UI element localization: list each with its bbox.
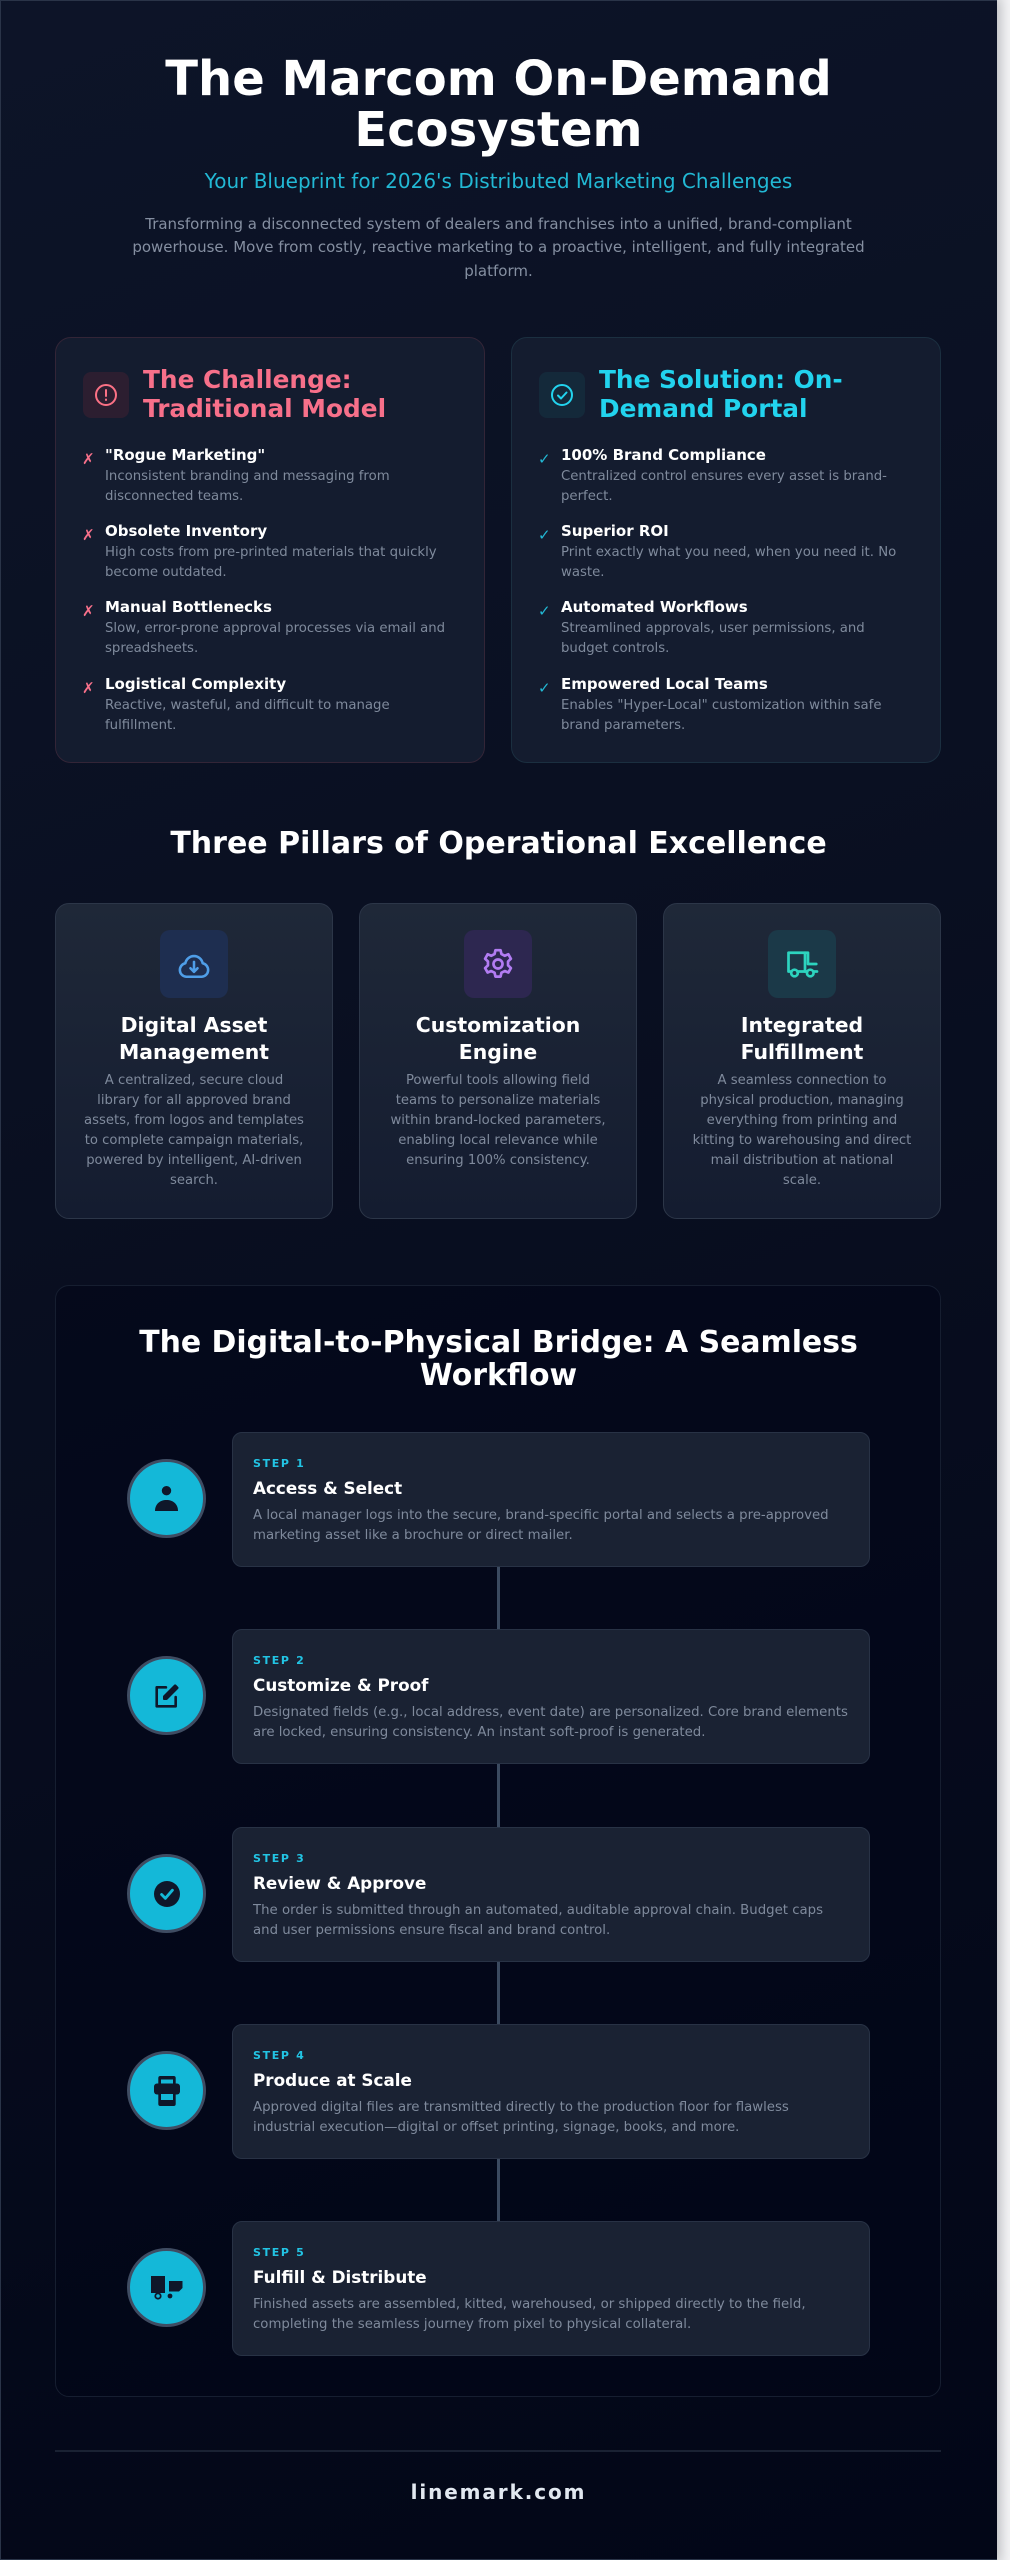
step number: STEP 5: [253, 2246, 305, 2259]
connector: step 4 to 5: [497, 2158, 500, 2221]
item: automated workflows: ✓: [538, 602, 551, 620]
icon: check circle: [539, 372, 585, 418]
description: assets, from logos and templates: [84, 1113, 304, 1128]
step description: [252, 1903, 823, 1938]
item: superior roi: Superior ROI: [561, 522, 669, 540]
panel: customization engine: [359, 903, 637, 1219]
icon: step 4 printer: [127, 2051, 206, 2130]
heading: [741, 1013, 863, 1064]
connector: step 2 to 3: [497, 1764, 500, 1827]
item: automated workflows: Streamlined approvals, user permissions, and: [561, 621, 865, 636]
heading: [119, 1013, 269, 1064]
step description: and user permissions ensure fiscal and brand control.: [253, 1923, 610, 1938]
step title: Access & Select: [253, 1478, 402, 1498]
item: obsolete inventory: [82, 522, 437, 580]
item: brand compliance: [538, 446, 887, 504]
item: logistical complexity: Logistical Complexity: [105, 675, 286, 693]
item: manual bottlenecks: [82, 598, 445, 656]
heading: three pillars: Three Pillars of Operational Excellence: [170, 826, 827, 861]
heading: solution: The Solution: On-: [599, 365, 843, 394]
icon: alert circle: [83, 372, 129, 418]
step 3 card: [232, 1827, 870, 1962]
item: empowered local teams: brand parameters.: [561, 718, 685, 733]
icon: step 3 check badge: [127, 1854, 206, 1933]
intro text: powerhouse. Move from costly, reactive marketing to a proactive, intelligent, and fully integrated: [132, 238, 865, 256]
heading: Engine: [459, 1040, 537, 1064]
heading: Digital Asset: [121, 1013, 267, 1037]
item: logistical complexity: Reactive, wasteful, and difficult to manage: [105, 698, 390, 713]
intro text: platform.: [464, 262, 533, 280]
item: manual bottlenecks: Slow, error-prone approval processes via email and: [105, 621, 445, 636]
description: scale.: [783, 1173, 821, 1188]
intro text: Transforming a disconnected system of dealers and franchises into a unified, brand-compliant: [145, 215, 852, 233]
icon: step 1 user: [127, 1459, 206, 1538]
step 2 card: [232, 1629, 870, 1764]
step description: are locked, ensuring consistency. An instant soft-proof is generated.: [253, 1725, 705, 1740]
step description: [253, 1508, 829, 1543]
description: [693, 1073, 911, 1188]
heading: Management: [119, 1040, 269, 1064]
item: logistical complexity: ✗: [82, 679, 95, 697]
item: rogue marketing: Inconsistent branding and messaging from: [105, 469, 390, 484]
item: logistical complexity: [82, 675, 390, 733]
heading: Customization: [416, 1013, 580, 1037]
panel: the solution: [511, 337, 941, 763]
description: physical production, managing: [700, 1093, 904, 1108]
heading: Integrated: [741, 1013, 863, 1037]
description: Powerful tools allowing field: [406, 1073, 590, 1088]
footer: website: linemark.com: [411, 2480, 586, 2504]
description: search.: [170, 1173, 218, 1188]
item: obsolete inventory: ✗: [82, 526, 95, 544]
item: rogue marketing: "Rogue Marketing": [105, 446, 265, 464]
item: automated workflows: Automated Workflows: [561, 598, 748, 616]
item: obsolete inventory: become outdated.: [105, 565, 227, 580]
icon: cloud download: [160, 930, 228, 998]
heading: workflow: The Digital-to-Physical Bridge: A Seamless: [139, 1325, 858, 1360]
description: ensuring 100% consistency.: [406, 1153, 590, 1168]
description: [84, 1073, 304, 1188]
heading: Fulfillment: [741, 1040, 863, 1064]
item: superior roi: waste.: [561, 565, 604, 580]
description: within brand-locked parameters,: [390, 1113, 606, 1128]
description: [390, 1073, 606, 1168]
item: brand compliance: ✓: [538, 450, 551, 468]
description: kitting to warehousing and direct: [693, 1133, 911, 1148]
description: powered by intelligent, AI-driven: [86, 1153, 302, 1168]
step number: STEP 2: [253, 1654, 305, 1667]
heading: solution: Demand Portal: [599, 394, 808, 423]
subtitle: Your Blueprint for 2026's Distributed Marketing Challenges: [205, 169, 792, 193]
step number: STEP 1: [253, 1457, 305, 1470]
item: empowered local teams: [538, 675, 882, 733]
description: mail distribution at national: [711, 1153, 893, 1168]
item: rogue marketing: ✗: [82, 450, 95, 468]
panel: workflow: [55, 1285, 941, 2397]
connector: step 1 to 2: [497, 1566, 500, 1629]
description: teams to personalize materials: [396, 1093, 600, 1108]
step description: The order is submitted through an automated, auditable approval chain. Budget caps: [253, 1903, 823, 1918]
description: to complete campaign materials,: [85, 1133, 303, 1148]
item: brand compliance: perfect.: [561, 489, 613, 504]
step description: [253, 2297, 806, 2332]
item: brand compliance: 100% Brand Compliance: [561, 446, 766, 464]
step description: A local manager logs into the secure, brand-specific portal and selects a pre-approved: [253, 1508, 829, 1523]
connector: step 3 to 4: [497, 1961, 500, 2024]
item: manual bottlenecks: Manual Bottlenecks: [105, 598, 272, 616]
step description: Finished assets are assembled, kitted, warehoused, or shipped directly to the field,: [253, 2297, 806, 2312]
description: everything from printing and: [707, 1113, 897, 1128]
description: enabling local relevance while: [398, 1133, 598, 1148]
icon: delivery truck: [768, 930, 836, 998]
step 5 card: [232, 2221, 870, 2356]
icon: step 2 edit: [127, 1656, 206, 1735]
item: rogue marketing: [82, 446, 390, 504]
item: superior roi: [538, 522, 896, 580]
heading: [416, 1013, 580, 1064]
item: rogue marketing: disconnected teams.: [105, 489, 243, 504]
panel: integrated fulfillment: [663, 903, 941, 1219]
heading: challenge: [143, 365, 386, 423]
icon: gear: [464, 930, 532, 998]
step description: industrial execution—digital or offset printing, signage, books, and more.: [253, 2120, 739, 2135]
item: empowered local teams: Empowered Local Teams: [561, 675, 768, 693]
item: empowered local teams: Enables "Hyper-Local" customization within safe: [561, 698, 882, 713]
step title: Customize & Proof: [253, 1675, 428, 1695]
title: The Marcom On-Demand: [165, 51, 832, 107]
step 4 card: [232, 2024, 870, 2159]
item: obsolete inventory: High costs from pre-printed materials that quickly: [105, 545, 437, 560]
step 1 card: [232, 1432, 870, 1567]
panel: digital asset management: [55, 903, 333, 1219]
item: superior roi: Print exactly what you need, when you need it. No: [561, 545, 896, 560]
item: logistical complexity: fulfillment.: [105, 718, 176, 733]
icon: step 5 trucks: [127, 2248, 206, 2327]
step number: STEP 3: [253, 1852, 305, 1865]
panel: the challenge: [55, 337, 485, 763]
title: [165, 51, 832, 158]
heading: challenge: Traditional Model: [143, 394, 386, 423]
step description: Designated fields (e.g., local address, event date) are personalized. Core brand elements: [253, 1705, 848, 1720]
item: superior roi: ✓: [538, 526, 551, 544]
heading: workflow: Workflow: [420, 1358, 577, 1393]
heading: solution: [599, 365, 843, 423]
item: obsolete inventory: Obsolete Inventory: [105, 522, 267, 540]
heading: challenge: The Challenge:: [143, 365, 352, 394]
intro text: [132, 215, 865, 280]
item: brand compliance: Centralized control ensures every asset is brand-: [561, 469, 887, 484]
item: manual bottlenecks: spreadsheets.: [105, 641, 198, 656]
step number: STEP 4: [253, 2049, 305, 2062]
item: empowered local teams: ✓: [538, 679, 551, 697]
item: automated workflows: budget controls.: [561, 641, 669, 656]
step title: Produce at Scale: [253, 2070, 412, 2090]
step description: completing the seamless journey from pixel to physical collateral.: [253, 2317, 691, 2332]
description: A centralized, secure cloud: [105, 1073, 283, 1088]
step description: [253, 1705, 848, 1740]
item: automated workflows: [538, 598, 865, 656]
step description: [253, 2100, 789, 2135]
item: manual bottlenecks: ✗: [82, 602, 95, 620]
step description: marketing asset like a brochure or direct mailer.: [253, 1528, 573, 1543]
title: Ecosystem: [354, 102, 643, 158]
description: A seamless connection to: [718, 1073, 886, 1088]
step title: Review & Approve: [253, 1873, 426, 1893]
step title: Fulfill & Distribute: [253, 2267, 427, 2287]
description: library for all approved brand: [97, 1093, 291, 1108]
step description: Approved digital files are transmitted directly to the production floor for flawless: [253, 2100, 789, 2115]
heading: workflow: [139, 1325, 858, 1393]
